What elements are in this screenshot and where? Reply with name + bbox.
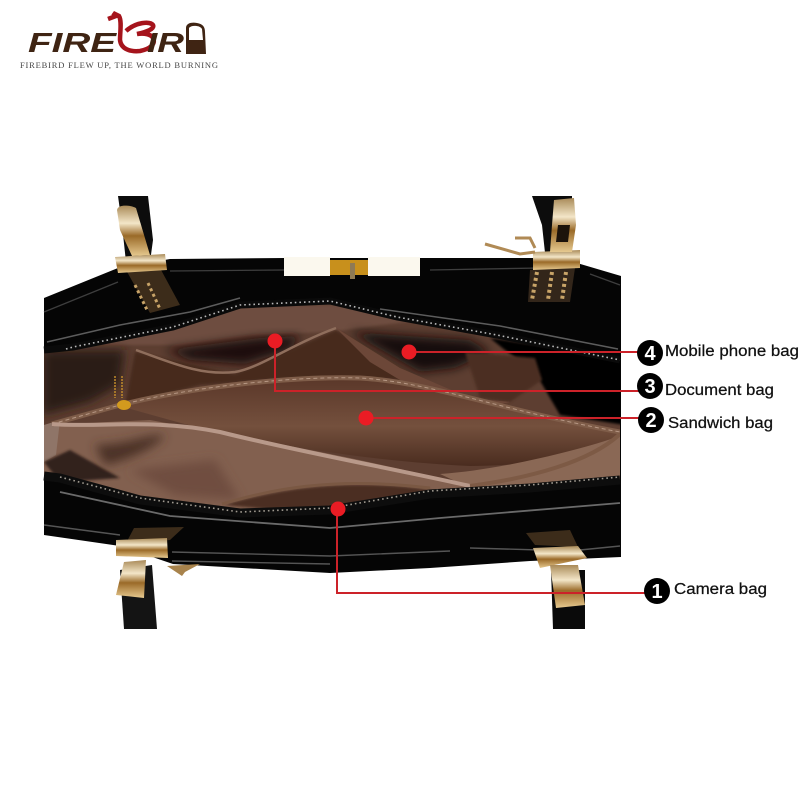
line to camera bag: [337, 509, 648, 593]
zipper pull: [115, 376, 131, 410]
label: camera bag: [644, 578, 767, 604]
handle bottom left: [120, 565, 157, 629]
centre clasp: [284, 257, 420, 279]
label: document bag: [637, 373, 774, 399]
phone pocket lump: [465, 352, 542, 402]
line to document bag: [275, 341, 640, 391]
line to mobile phone bag: [403, 351, 640, 353]
right top loop: [550, 198, 576, 252]
label: document bag: 3: [644, 376, 656, 398]
handbag photo: [40, 196, 625, 629]
dark lower-left band: [44, 450, 120, 482]
phone pocket shadow: [350, 332, 490, 372]
interior lining: [40, 295, 625, 515]
label: camera bag: 1: [651, 581, 663, 603]
left top loop: [117, 206, 150, 256]
right clasp plate: [528, 268, 575, 302]
bottom right clasp: [526, 530, 587, 608]
marker: mobile phone bag: [402, 344, 416, 360]
dark right interior: [490, 338, 625, 425]
bag body: [44, 258, 621, 573]
top rim highlights: [44, 268, 620, 312]
zip seam upper: [52, 378, 620, 432]
marker: document bag: [268, 334, 282, 348]
label: mobile phone bag: 4: [644, 343, 656, 365]
right top buckle: [533, 250, 580, 270]
phone pocket flap: [339, 330, 509, 404]
handle bottom right: [551, 570, 585, 629]
right charm: [485, 238, 535, 254]
callout lines: [275, 341, 648, 593]
marker: sandwich bag: [358, 410, 374, 426]
label: mobile phone bag: Mobile phone bag: [665, 343, 799, 360]
marker: camera bag: [330, 502, 346, 516]
logo tagline: FIREBIRD FLEW UP, THE WORLD BURNING: [20, 60, 218, 70]
label: sandwich bag: [638, 407, 773, 433]
lower lining: [44, 420, 470, 515]
label: sandwich bag: 2: [645, 410, 657, 432]
sandwich pocket: [130, 388, 616, 466]
line to sandwich bag: [365, 417, 640, 419]
label: mobile phone bag: [637, 340, 799, 366]
bottom zipper highlight: [60, 492, 620, 528]
lower dark pocket edge: [226, 485, 428, 508]
rear pocket upper band: [100, 305, 420, 345]
bottom rim highlights: [44, 525, 620, 564]
label: document bag: Document bag: [665, 382, 774, 399]
left top buckle: [115, 254, 167, 273]
rear pocket seam: [136, 328, 336, 373]
left pale fold: [44, 420, 60, 462]
top zipper: [44, 301, 620, 360]
handle top right: [532, 196, 572, 262]
logo bird B: [108, 13, 154, 51]
right lower panel: [440, 436, 620, 490]
below rear flap: [125, 330, 400, 400]
left dark side: [42, 350, 125, 415]
label: camera bag: Camera bag: [674, 581, 767, 598]
handle top left: [118, 196, 153, 262]
top zipper tape highlight: [47, 298, 618, 349]
logo wordmark end: IR: [147, 27, 185, 58]
second pocket seam: [222, 483, 430, 504]
lower folds: [95, 435, 165, 465]
bottom left clasp: [116, 527, 200, 598]
logo: [20, 13, 218, 70]
left clasp plate: [126, 268, 180, 313]
logo bag icon: [186, 23, 206, 54]
logo wordmark: FIRE: [28, 27, 118, 58]
back shadow: [165, 336, 300, 364]
label: sandwich bag: Sandwich bag: [668, 415, 773, 432]
bottom zipper: [44, 476, 620, 513]
zip seam lower: [52, 424, 470, 486]
